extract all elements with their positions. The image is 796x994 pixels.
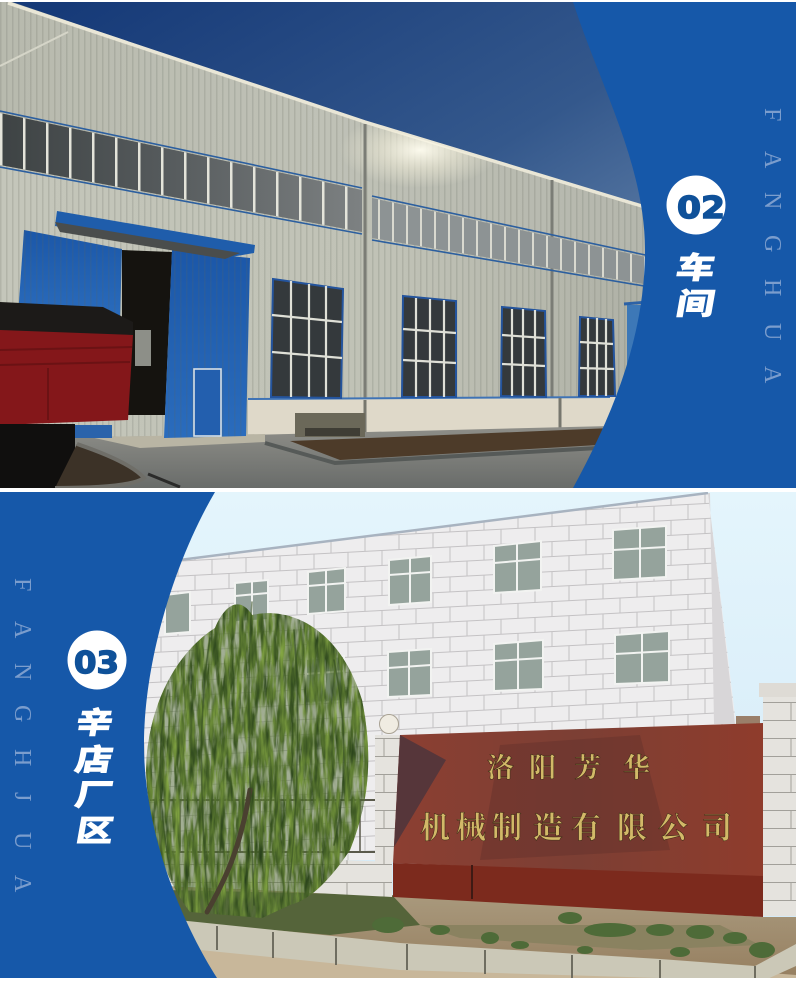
office building — [140, 493, 760, 860]
red truck — [0, 302, 180, 488]
grass tufts — [372, 912, 775, 958]
heading: 辛店厂区: 厂 — [73, 779, 115, 812]
large doors — [18, 211, 255, 438]
badge: number 02: 02 — [677, 191, 725, 226]
heading: 车间: 车 — [674, 252, 717, 285]
heading: 辛店厂区: 辛 — [74, 706, 115, 739]
curb and road — [200, 950, 796, 978]
window strip — [0, 111, 650, 287]
badge: number 03 — [68, 630, 126, 690]
dirt bed — [290, 428, 612, 460]
panel: Xindian plant photo section — [0, 492, 796, 980]
concrete trough — [295, 413, 365, 437]
blue curved panel: plant — [0, 492, 217, 978]
brick gate pillar — [375, 735, 402, 862]
fence and low wall — [150, 800, 392, 897]
sign line 1: 洛阳芳华: 洛阳芳华 — [487, 753, 650, 783]
photo: plant office building and company sign — [144, 492, 796, 978]
heading: 车间 — [674, 252, 717, 321]
photo: factory workshop building — [0, 2, 660, 490]
willow tree — [146, 602, 368, 918]
heading: 辛店厂区: 店 — [73, 744, 115, 777]
globe lamp — [380, 714, 398, 734]
tall windows — [271, 279, 615, 398]
ground and plant bed — [140, 885, 796, 978]
building windows — [165, 526, 669, 703]
panel: workshop photo section — [0, 2, 796, 490]
red company sign wall — [393, 723, 763, 917]
sign line 2: 机械制造有限公司: 机械制造有限公司 — [420, 812, 732, 845]
badge: number 02 — [666, 176, 726, 234]
heading: 车间: 间 — [674, 288, 717, 321]
right brick pillar — [763, 683, 796, 916]
vertical brand text: FANGHUA: FANGHUA — [759, 108, 785, 384]
blue curved panel: workshop — [573, 2, 796, 488]
vertical brand text: FANGJHUA: FANGHJUA — [9, 578, 35, 893]
badge: number 03: 03 — [74, 646, 119, 681]
heading: 辛店厂区: 区 — [74, 815, 116, 848]
heading: 辛店厂区 — [73, 706, 116, 848]
white base band — [248, 397, 616, 434]
ground — [75, 426, 604, 488]
